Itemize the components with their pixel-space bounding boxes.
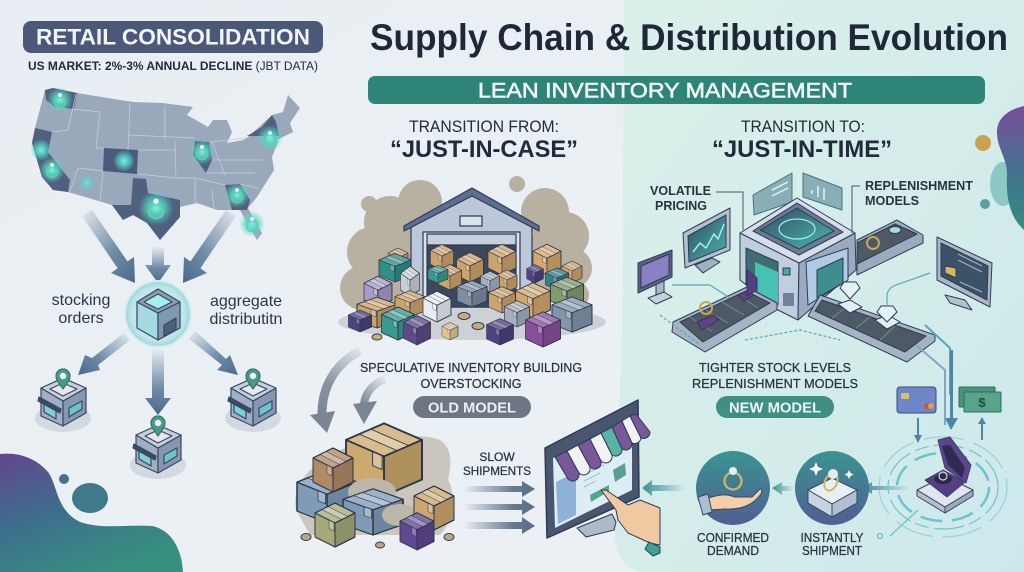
label: confirmed demand: CONFIRMED xyxy=(697,531,769,545)
label: confirmed demand: DEMAND xyxy=(707,544,759,558)
data flow lines xyxy=(660,273,950,425)
monitor: small kiosk xyxy=(638,250,672,304)
label: instantly shipment xyxy=(800,531,864,558)
arrow: confirmed demand to storefront xyxy=(642,480,686,496)
label: instantly shipment: INSTANTLY xyxy=(800,531,864,545)
banner: lean inventory management: LEAN INVENTORY MANAGEMENT xyxy=(478,78,852,102)
badge: new model xyxy=(716,396,834,418)
icon: cash xyxy=(959,387,1001,412)
caption: tighter stock levels: TIGHTER STOCK LEVELS xyxy=(699,360,851,375)
icon: instant shipment circle xyxy=(795,451,869,525)
arrows: states to hub xyxy=(82,210,236,283)
decorative blob: right edge xyxy=(975,106,1024,230)
conveyor: front left xyxy=(672,270,777,352)
label: replenishment models: MODELS xyxy=(865,193,919,208)
arrow: ring box to instant shipment xyxy=(862,482,912,494)
heading: transition from: “JUST-IN-CASE” xyxy=(390,136,578,163)
icon: confirmed demand circle xyxy=(696,451,770,525)
caption: tighter stock levels xyxy=(692,360,858,391)
heading: transition from: TRANSITION FROM: xyxy=(409,118,559,136)
arrows: warehouse to overstock pile xyxy=(310,351,385,433)
machine body xyxy=(740,198,856,320)
caption: speculative inventory: SPECULATIVE INVENTORY BUILDING xyxy=(360,360,582,375)
icon: store right xyxy=(225,369,281,432)
conveyor: back right xyxy=(857,220,923,275)
banner: lean inventory management xyxy=(368,76,985,104)
badge: new model: NEW MODEL xyxy=(729,400,821,416)
label: slow shipments: SLOW xyxy=(479,450,515,464)
icon: ring box on platform xyxy=(878,437,1007,538)
label: stocking orders: stocking xyxy=(52,292,110,309)
arrows: hub to stores xyxy=(78,331,238,415)
icon: distribution hub xyxy=(125,281,191,347)
heading: transition to xyxy=(712,118,892,163)
icon: cash: $ xyxy=(978,395,986,410)
label: aggregate distribution: distributitn xyxy=(210,311,282,328)
illustration: overstock box pile xyxy=(295,423,454,550)
badge: old model: OLD MODEL xyxy=(428,400,516,416)
label: replenishment models: REPLENISHMENT xyxy=(865,178,973,193)
label: volatile pricing: PRICING xyxy=(655,198,707,213)
illustration: automated fulfilment machine xyxy=(638,173,992,425)
label: confirmed demand xyxy=(697,531,769,558)
map: United States xyxy=(30,87,300,240)
title: Supply Chain & Distribution Evolution xyxy=(370,17,1008,58)
panel: retail consolidation xyxy=(23,21,323,479)
heading: retail consolidation xyxy=(23,21,323,53)
subheading: market decline: US MARKET: 2%-3% ANNUAL DECLINE (JBT DATA) xyxy=(28,61,318,73)
caption: speculative inventory xyxy=(360,360,582,391)
label: aggregate distribution: aggregate xyxy=(210,293,282,310)
label: instantly shipment: SHIPMENT xyxy=(802,544,862,558)
label: stocking orders: orders xyxy=(58,310,104,327)
heading: transition to: “JUST-IN-TIME” xyxy=(712,136,892,163)
label: volatile pricing: VOLATILE xyxy=(650,183,711,198)
label: replenishment models xyxy=(852,178,973,233)
label: slow shipments: SHIPMENTS xyxy=(463,464,531,478)
monitor: dashboard xyxy=(937,237,992,310)
badge: old model xyxy=(413,396,531,418)
icon: store left xyxy=(35,369,91,432)
icon: store center xyxy=(130,416,186,479)
icon: credit card xyxy=(897,387,936,413)
illustration: online store monitor xyxy=(545,400,660,556)
decorative blob: bottom left xyxy=(0,454,183,572)
monitor: volatile pricing chart xyxy=(683,208,730,273)
arrow: shipment to confirmed demand xyxy=(772,482,794,495)
heading: transition to: TRANSITION TO: xyxy=(741,118,865,136)
arrows: payment flow to ring box xyxy=(914,350,986,443)
illustration: overstocked warehouse xyxy=(338,176,606,347)
caption: tighter stock levels: REPLENISHMENT MODELS xyxy=(692,376,858,391)
floating data panels xyxy=(753,173,842,215)
heading: transition from xyxy=(390,118,578,163)
conveyor: front right xyxy=(808,282,935,362)
heading: retail consolidation: RETAIL CONSOLIDATION xyxy=(36,24,310,50)
label: volatile pricing xyxy=(650,183,743,230)
arrows: slow shipments xyxy=(465,481,535,534)
label: slow shipments xyxy=(463,450,531,478)
caption: speculative inventory: OVERSTOCKING xyxy=(420,376,522,391)
